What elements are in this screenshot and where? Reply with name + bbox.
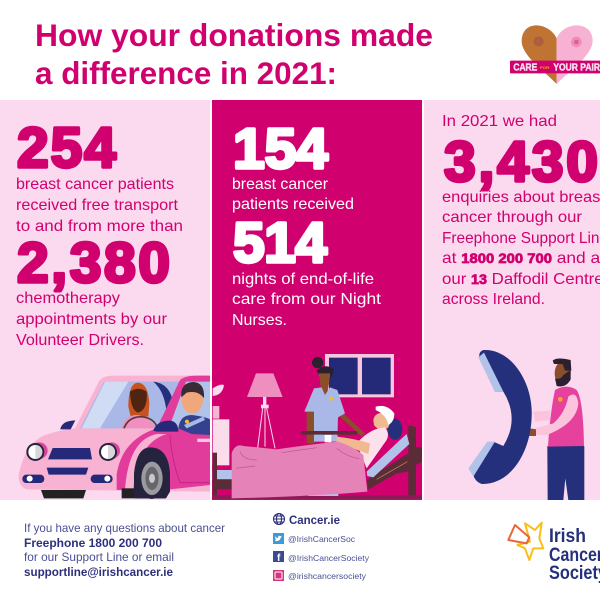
passenger [122, 383, 157, 428]
title [35, 17, 433, 91]
footer: contact text [24, 521, 225, 579]
footer: contact text: supportline@irishcancer.ie [24, 565, 173, 579]
text: enquiries description: at 1800 200 700 and at [442, 250, 600, 267]
logo wordmark [549, 525, 600, 584]
logo wordmark: Irish [549, 525, 586, 547]
footer: contact text: Freephone 1800 200 700 [24, 536, 162, 550]
car door [117, 376, 210, 489]
driver [178, 382, 210, 435]
lamp [247, 373, 283, 451]
blanket folds [236, 448, 359, 468]
logo: care for your pair: FOR [540, 65, 549, 70]
phone [468, 350, 532, 484]
panel: support line [424, 100, 600, 500]
text: nights of care: care from our Night [232, 291, 382, 308]
text: patients received: breast cancer [232, 176, 328, 193]
icon: globe [274, 514, 284, 524]
text: nights of care [232, 271, 382, 329]
text: transport description: received free transport [16, 197, 179, 214]
stat: 154: 154 [233, 117, 328, 181]
logo: care for your pair: CARE [513, 63, 537, 74]
footer: contact text: for our Support Line or email [24, 550, 174, 564]
illustration: phone and man [468, 350, 584, 500]
man [524, 358, 584, 500]
bedside table [213, 385, 233, 497]
text: nights of care: Nurses. [232, 312, 287, 329]
logo: care for your pair [510, 25, 600, 84]
wheel [122, 488, 165, 498]
text: patients received [232, 176, 354, 213]
icon: instagram [273, 570, 284, 581]
icon: daffodil [508, 523, 543, 560]
illustration: nurse and patient [213, 354, 422, 499]
footer: contact text: If you have any questions about cancer [24, 521, 225, 535]
text: nights of care: nights of end-of-life [232, 271, 374, 288]
text: intro: In 2021 we had [442, 113, 557, 130]
stat: 254: 254 [17, 116, 116, 180]
text: enquiries description [442, 189, 600, 308]
text: patients received: patients received [232, 196, 354, 213]
text: enquiries description: our 13 Daffodil Centres [442, 271, 600, 288]
panel: night nurses [212, 100, 422, 500]
icon: facebook: f [277, 553, 281, 564]
bed [213, 426, 422, 499]
text: transport description: to and from more than [16, 218, 183, 235]
car body [19, 376, 210, 492]
door detail [170, 435, 210, 483]
window [325, 354, 394, 397]
stat: 3,430: 3,430 [444, 130, 598, 194]
footer: social links [273, 514, 370, 581]
text: chemotherapy description: appointments by our [16, 311, 167, 328]
nurse [304, 357, 363, 496]
text: enquiries description: enquiries about breast [442, 189, 600, 206]
text: transport description [16, 176, 183, 235]
stat: 514: 514 [233, 211, 327, 275]
blanket [232, 442, 367, 498]
icon: twitter [273, 533, 284, 544]
text: transport description: breast cancer patients [16, 176, 174, 193]
panel: transport [0, 100, 210, 500]
website: Cancer.ie [289, 515, 340, 527]
text: enquiries description: cancer through our [442, 209, 582, 226]
text: chemotherapy description [16, 290, 167, 349]
illustration: car [19, 376, 210, 499]
patient [301, 406, 409, 477]
twitter handle: @IrishCancerSoc [288, 534, 356, 544]
mirror [153, 421, 178, 432]
instagram handle: @irishcancersociety [288, 571, 367, 581]
text: enquiries description: across Ireland. [442, 291, 545, 308]
logo: irish cancer society [508, 523, 600, 584]
stat: 2,380: 2,380 [17, 231, 170, 295]
car windows [80, 382, 187, 428]
title: How your donations made [35, 17, 433, 53]
headlights and grille [31, 442, 48, 459]
title: a difference in 2021: [35, 55, 337, 91]
text: chemotherapy description: Volunteer Drivers. [16, 332, 144, 349]
facebook handle: @IrishCancerSociety [288, 553, 370, 563]
text: chemotherapy description: chemotherapy [16, 290, 120, 307]
